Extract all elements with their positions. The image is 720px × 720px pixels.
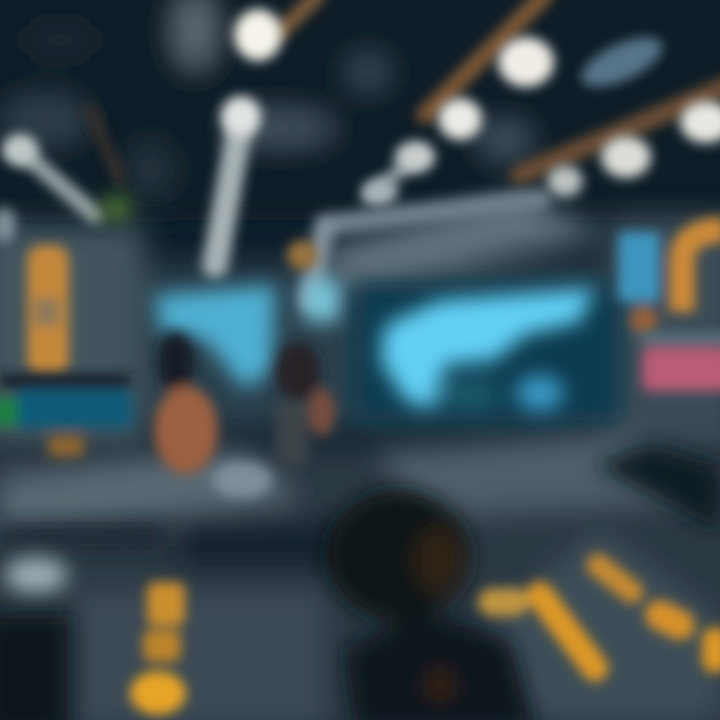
- right blue panel and orange arch: [618, 230, 720, 334]
- right pink bar: [640, 333, 720, 391]
- central world map screen: [355, 285, 620, 420]
- dark floor shapes: [0, 445, 720, 720]
- yellow diagonal console lights: [492, 565, 715, 668]
- left cyan screen: [155, 278, 341, 390]
- person two: [212, 342, 335, 498]
- white floor glow: [4, 557, 68, 593]
- yellow vertical floor lights: [130, 582, 186, 715]
- ceiling light strips: [20, 125, 540, 300]
- brown ceiling beams: [90, 0, 720, 180]
- person one: [154, 332, 218, 474]
- left teal console: [0, 374, 132, 457]
- mid walls: [0, 195, 720, 485]
- small orange light: [287, 240, 317, 270]
- foreground silhouette: [326, 490, 535, 720]
- green accent: [101, 195, 131, 221]
- ceiling lights: [0, 9, 720, 243]
- ceiling: [0, 0, 720, 220]
- floor: [0, 430, 720, 720]
- left orange panel: [27, 245, 69, 375]
